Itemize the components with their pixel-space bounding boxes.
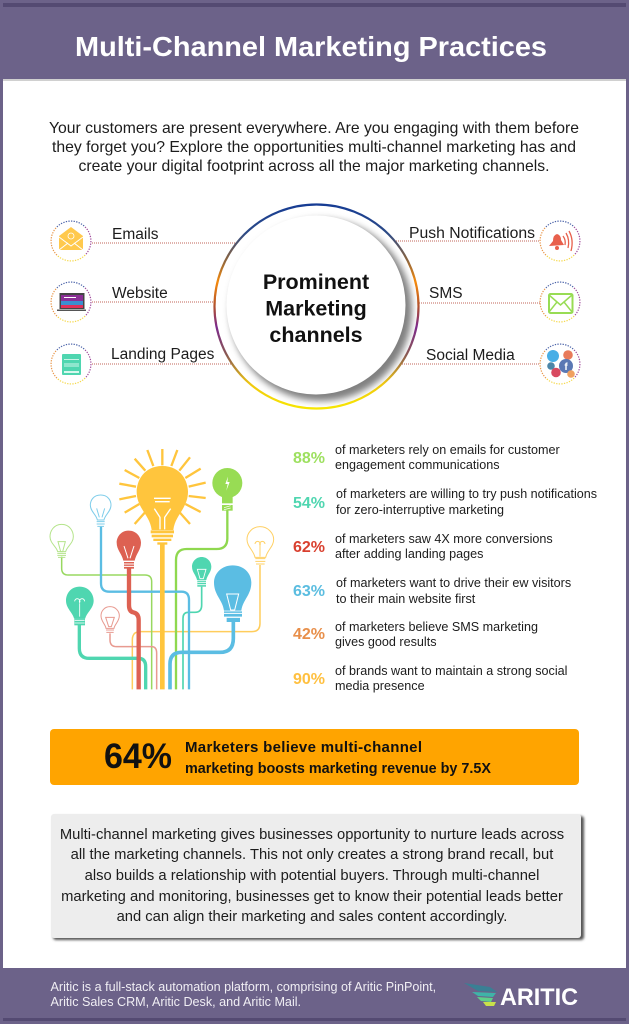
statistic: social media bbox=[293, 664, 567, 693]
summary text box: marketing and monitoring, businesses get to know their potential leads better bbox=[61, 889, 563, 905]
footer text: Aritic Sales CRM, Aritic Desk, and Aritic Mail. bbox=[50, 995, 301, 1009]
channel: Landing Pages: Landing Pages bbox=[111, 346, 215, 363]
channel: Emails: Emails bbox=[112, 226, 159, 243]
statistic: social media: 90% bbox=[293, 671, 325, 688]
central circle: prominent marketing channels bbox=[214, 204, 418, 408]
big blue bulb bbox=[214, 565, 251, 622]
statistic: emails: of marketers rely on emails for customer bbox=[335, 443, 560, 457]
statistic: SMS bbox=[293, 620, 538, 649]
channel: Social Media: f bbox=[564, 362, 568, 373]
channel: Landing Pages bbox=[51, 344, 215, 384]
statistic: social media: media presence bbox=[335, 679, 425, 693]
intro text bbox=[49, 120, 579, 175]
intro text: Your customers are present everywhere. Are you engaging with them before bbox=[49, 120, 579, 137]
outlined yellow bulb bbox=[247, 527, 274, 564]
statistic: emails bbox=[293, 443, 560, 472]
footer text: Aritic is a full-stack automation platform, comprising of Aritic PinPoint, bbox=[50, 980, 436, 994]
summary text box: Multi-channel marketing gives businesses opportunity to nurture leads across bbox=[60, 827, 564, 843]
statistic: emails: engagement communications bbox=[335, 458, 500, 472]
orange callout banner: marketing boosts marketing revenue by 7.5X bbox=[185, 761, 491, 777]
statistic: landing pages: after adding landing pages bbox=[335, 547, 483, 561]
statistic: push notifications: 54% bbox=[293, 495, 325, 512]
statistic: push notifications: of marketers are willing to try push notifications bbox=[336, 487, 597, 501]
outlined blue bulb bbox=[90, 495, 111, 526]
Aritic logo bbox=[464, 983, 578, 1011]
summary text box: all the marketing channels. This not only creates a strong brand recall, but bbox=[71, 847, 553, 863]
lime bulb bbox=[212, 468, 242, 511]
bulb stems bbox=[62, 510, 260, 689]
statistic: SMS: 42% bbox=[293, 626, 325, 643]
channel: Social Media: Social Media bbox=[426, 347, 515, 364]
footer text bbox=[50, 980, 436, 1009]
summary text box: also builds a relationship with potential buyers. Through multi-channel bbox=[85, 868, 539, 884]
statistic: SMS: of marketers believe SMS marketing bbox=[335, 620, 538, 634]
footer band bbox=[0, 968, 629, 1024]
channel: Website: Website bbox=[112, 285, 168, 302]
channel: Social Media bbox=[426, 344, 580, 384]
central circle: prominent marketing channels: Prominent bbox=[263, 270, 369, 294]
outlined pink bulb bbox=[101, 607, 119, 632]
summary text box: and can align their marketing and sales content accordingly. bbox=[117, 909, 507, 925]
statistic: SMS: gives good results bbox=[335, 635, 437, 649]
teal bulb left bbox=[66, 587, 94, 625]
statistic: social media: of brands want to maintain a strong social bbox=[335, 664, 567, 678]
outlined green bulb bbox=[50, 524, 73, 557]
statistic: landing pages bbox=[293, 532, 553, 561]
red bulb bbox=[117, 531, 141, 569]
statistic: landing pages: 62% bbox=[293, 539, 325, 556]
channel: SMS: SMS bbox=[429, 285, 463, 302]
orange callout banner bbox=[50, 729, 579, 785]
title: Multi-Channel Marketing Practices bbox=[75, 31, 547, 62]
central circle: prominent marketing channels: Marketing bbox=[265, 296, 367, 320]
header band bbox=[0, 0, 629, 79]
channel: Website bbox=[51, 282, 168, 322]
orange callout banner: Marketers believe multi-channel bbox=[185, 739, 422, 756]
statistic: website: to their main website first bbox=[336, 592, 476, 606]
statistic: push notifications bbox=[293, 487, 597, 517]
statistic: website bbox=[293, 576, 571, 606]
channel: Push Notifications: Push Notifications bbox=[409, 225, 535, 242]
channel: SMS bbox=[429, 282, 580, 322]
statistic: push notifications: for zero-interruptive marketing bbox=[336, 503, 504, 517]
intro text: they forget you? Explore the opportunities multi-channel marketing has and bbox=[52, 139, 576, 156]
summary text box bbox=[51, 814, 584, 940]
central circle: prominent marketing channels: channels bbox=[269, 323, 363, 347]
Aritic logo: ARITIC bbox=[500, 984, 578, 1011]
intro text: create your digital footprint across all the major marketing channels. bbox=[78, 158, 550, 175]
statistic: website: of marketers want to drive their ew visitors bbox=[336, 576, 571, 590]
teal bulb right bbox=[192, 557, 211, 587]
connector lines bbox=[92, 241, 540, 364]
orange callout banner: 64% bbox=[104, 737, 172, 776]
statistic: website: 63% bbox=[293, 583, 325, 600]
statistic: emails: 88% bbox=[293, 450, 325, 467]
channel: Emails bbox=[51, 221, 159, 261]
big yellow bulb with rays bbox=[119, 449, 206, 545]
channel: Push Notifications bbox=[409, 221, 580, 261]
statistic: landing pages: of marketers saw 4X more conversions bbox=[335, 532, 553, 546]
light bulb tree illustration bbox=[50, 449, 274, 689]
